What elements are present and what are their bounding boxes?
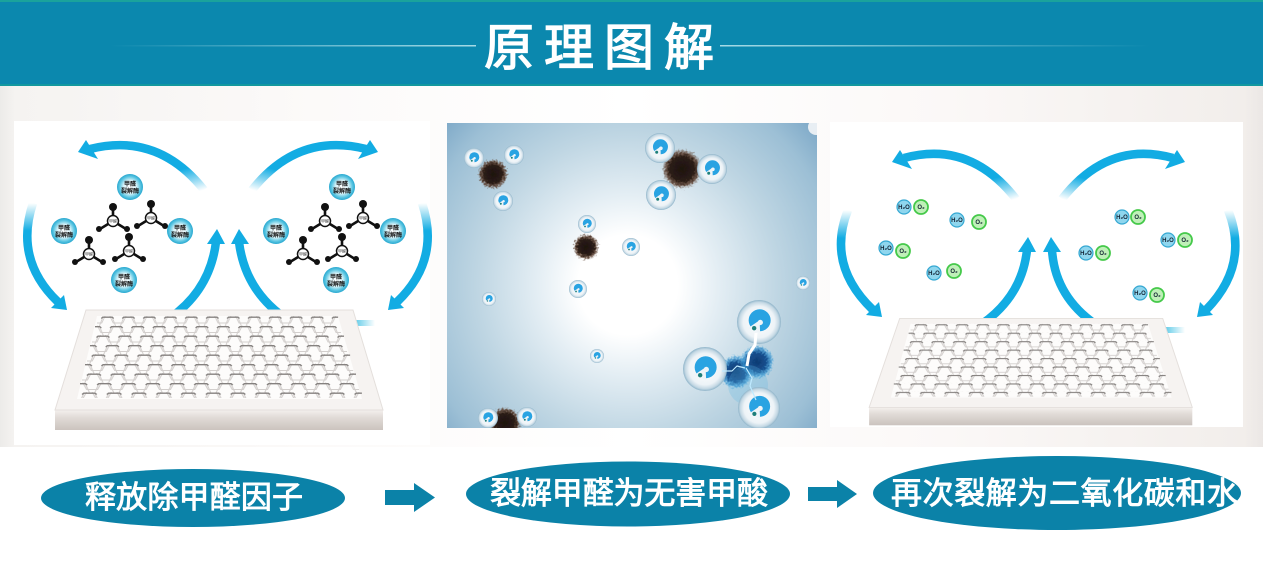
water and oxygen molecules, left group [879, 200, 986, 280]
arrow: top right arc [252, 140, 378, 190]
step 1 label: 释放除甲醛因子 [85, 480, 303, 515]
arrow: left arc [841, 210, 882, 317]
formaldehyde molecules, right group [286, 200, 380, 265]
panel: micrograph of bubbles [447, 119, 824, 439]
filter plate [55, 310, 383, 430]
arrow: top left arc [78, 140, 204, 190]
step 3 pill [873, 456, 1241, 530]
step 3 label: 再次裂解为二氧化碳和水 [891, 476, 1238, 511]
bubble cluster bottom left [478, 406, 537, 428]
arrow: centre left rising arc [170, 229, 225, 318]
bubble cluster top left [464, 145, 524, 211]
bottom white area [0, 447, 1263, 571]
arrow: left arc [27, 203, 67, 310]
header banner [0, 0, 1263, 86]
arrow: centre right rising arc [1043, 237, 1095, 324]
title: 原理图解 [484, 20, 714, 76]
step 2 label: 裂解甲醛为无害甲酸 [490, 476, 768, 511]
airflow hint [355, 320, 375, 326]
arrow: centre left rising arc [982, 237, 1036, 324]
arrow: centre right rising arc [231, 229, 285, 318]
title rule right [720, 45, 1150, 46]
arrow: step 1 to step 2 [385, 483, 435, 512]
airflow hint [1165, 327, 1185, 333]
panel: decomposition products [830, 122, 1243, 427]
corner bubble [808, 123, 817, 135]
background band behind panels [0, 85, 1263, 447]
enzyme circles, left group [51, 174, 193, 293]
water and oxygen molecules, right group [1079, 210, 1192, 302]
enzyme circles, right group [263, 174, 406, 293]
arrow: right arc [1197, 210, 1235, 317]
filter plate [869, 318, 1192, 425]
arrow: right arc [388, 203, 428, 310]
bubble cluster centre [569, 215, 640, 298]
small bubbles [482, 276, 810, 363]
formaldehyde molecules, left group [72, 200, 168, 265]
bubble cluster with lightning [683, 300, 781, 429]
step 1 pill [41, 469, 345, 527]
panel: release factor [14, 121, 430, 445]
lightning [722, 333, 756, 400]
arrow: step 2 to step 3 [808, 480, 857, 508]
bubble cluster top centre [645, 133, 727, 210]
title rule left [110, 45, 476, 46]
arrow: top right arc [1062, 150, 1185, 199]
step 2 pill [466, 462, 790, 526]
arrow: top left arc [892, 150, 1016, 199]
